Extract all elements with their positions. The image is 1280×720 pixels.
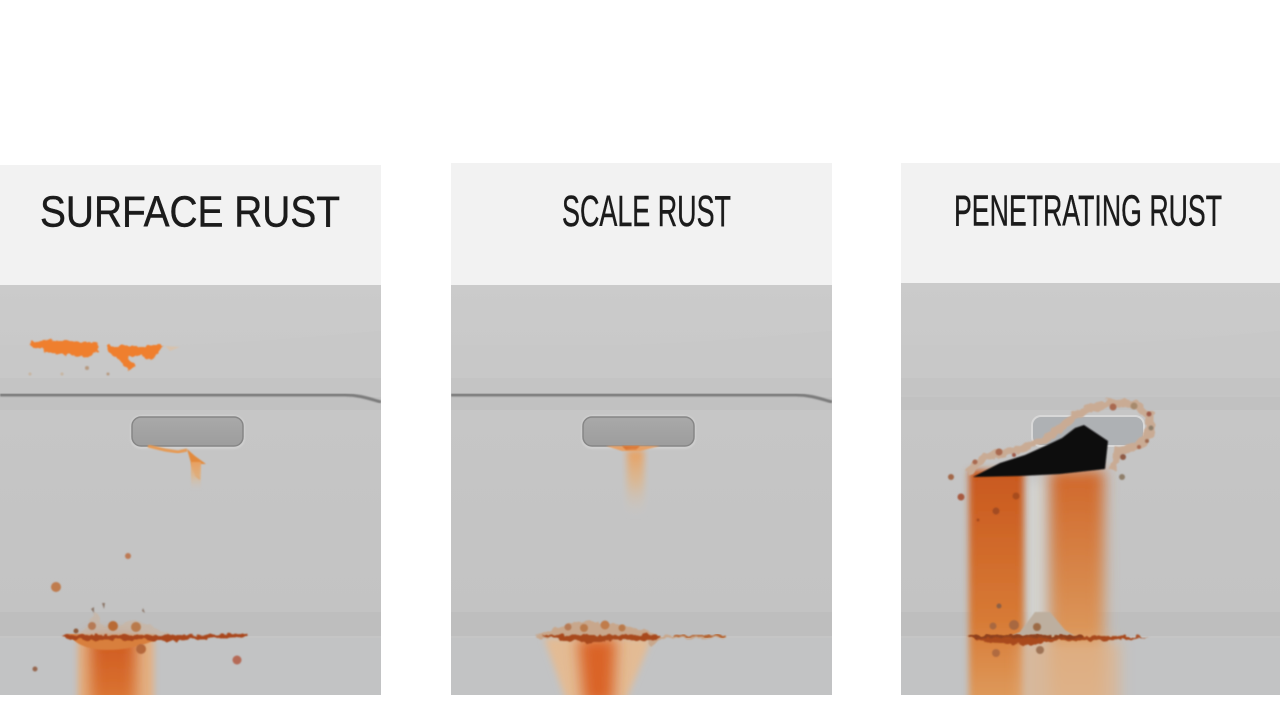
header: penetrating rust bbox=[901, 163, 1280, 283]
door crease line bbox=[901, 392, 1280, 396]
rust streaks: two long runs bbox=[969, 470, 1120, 720]
header: scale rust bbox=[451, 163, 832, 285]
header: surface rust bbox=[0, 165, 381, 285]
rust drip: below handle bbox=[606, 445, 660, 504]
door crease line bbox=[0, 395, 381, 402]
car door illustration: scale rust bbox=[451, 285, 832, 705]
panel: penetrating rust bbox=[901, 163, 1280, 720]
rust flecks bbox=[948, 454, 1126, 522]
rust stain: lower door bbox=[536, 620, 727, 695]
rust stain: lower door bbox=[966, 604, 1150, 657]
door crease line bbox=[451, 395, 832, 402]
rust halo around hole bbox=[968, 402, 1154, 472]
door handle bbox=[130, 415, 245, 449]
panel: surface rust bbox=[0, 165, 381, 716]
heading: surface rust: SURFACE RUST bbox=[40, 188, 340, 236]
hole: black rust-through bbox=[973, 425, 1108, 477]
heading: scale rust: SCALE RUST bbox=[562, 187, 731, 236]
rust patches: upper door bbox=[28, 340, 180, 376]
car door illustration: penetrating rust bbox=[901, 283, 1280, 720]
car door illustration: surface rust bbox=[0, 285, 381, 716]
rust stain: lower door bbox=[32, 552, 248, 695]
panel: scale rust bbox=[451, 163, 832, 705]
door handle bbox=[581, 415, 696, 449]
door handle bbox=[1032, 416, 1144, 446]
rust drip: below handle bbox=[148, 446, 206, 490]
